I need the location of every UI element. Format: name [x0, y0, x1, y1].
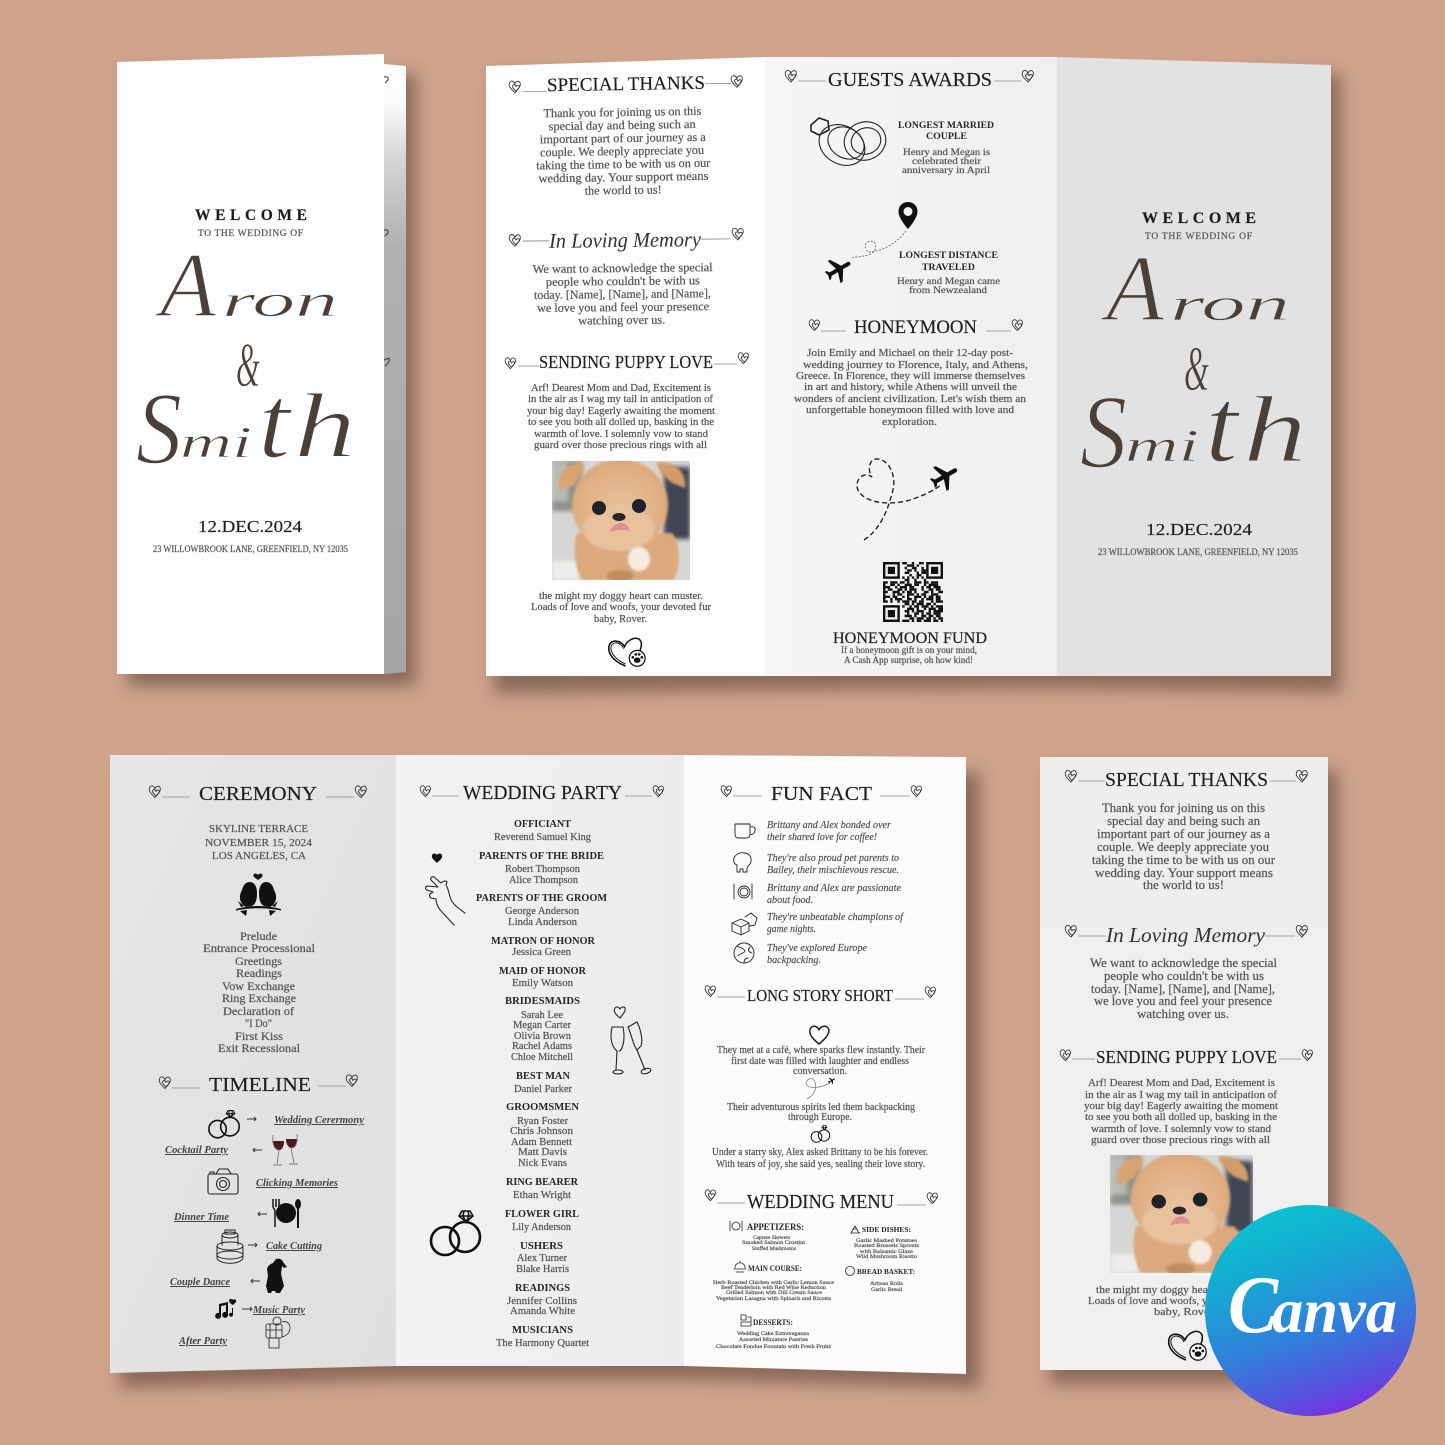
back cover: 12.DEC.2024 — [1146, 520, 1253, 539]
text: thanks message: the world to us! — [585, 182, 662, 198]
text: memory message — [1090, 956, 1278, 1021]
text: story part one — [717, 1045, 926, 1077]
menu: bread basket: Garlic Bread — [871, 1287, 902, 1293]
script names: S — [136, 372, 182, 486]
text: puppy letter: your big day! Eagerly awaiting the moment — [527, 406, 715, 417]
icon: music notes — [215, 1299, 236, 1319]
text: puppy letter: in the air as I wag my tail in anticipation of — [528, 394, 714, 405]
text: puppy letter — [1084, 1077, 1278, 1146]
text: puppy letter: Arf! Dearest Mom and Dad, Excitement is — [531, 383, 711, 394]
text: longest married couple: celebrated their — [912, 156, 982, 167]
text: story part one: conversation. — [793, 1066, 847, 1077]
back cover: mi — [1125, 421, 1199, 471]
panel group: tri-fold inside top — [486, 57, 1341, 694]
list: wedding party names: BRIDESMAIDS — [505, 996, 580, 1007]
text: honeymoon description: unforgettable honeymoon filled with love and — [806, 404, 1015, 416]
list: wedding party names: Megan Carter — [513, 1020, 571, 1031]
back cover: ron — [1170, 279, 1290, 331]
timeline labels: Cake Cutting — [266, 1241, 322, 1252]
icon: dancing couple — [266, 1259, 287, 1293]
back cover — [1080, 210, 1307, 558]
timeline labels: Music Party — [252, 1305, 306, 1316]
heading: in loving memory — [1065, 923, 1307, 947]
text: ceremony venue — [205, 823, 313, 862]
text: memory message: people who couldn't be with us — [1104, 969, 1264, 983]
menu: side dishes — [854, 1225, 919, 1260]
timeline labels — [165, 1115, 365, 1347]
list: wedding party names: Amanda White — [510, 1306, 575, 1317]
icon: after party — [266, 1317, 290, 1348]
menu: side dishes: Wild Mushroom Risotto — [856, 1254, 917, 1260]
list: wedding party names: Alex Turner — [517, 1253, 567, 1264]
text: fun facts: game nights. — [767, 924, 816, 935]
text: puppy sign-off: the might my doggy heart can muster. — [1096, 1284, 1270, 1296]
list: wedding party names: Sarah Lee — [521, 1010, 563, 1021]
text: thanks message: taking the time to be with us on our — [1092, 853, 1276, 867]
list: wedding party names: Chris Johnson — [510, 1126, 574, 1137]
text: thanks message: taking the time to be with us on our — [536, 156, 710, 172]
heading: wedding menu — [705, 1190, 938, 1213]
heading: wedding party: WEDDING PARTY — [463, 783, 622, 804]
icon: wine glasses — [273, 1134, 298, 1165]
list: wedding party names: Jennifer Collins — [507, 1296, 577, 1307]
heading: honeymoon — [809, 317, 1023, 338]
icon: heart flight path — [857, 458, 964, 540]
text: puppy letter: warmth of love. I solemnly vow to stand — [534, 429, 709, 440]
text: longest married couple: COUPLE — [926, 131, 967, 142]
heading: honeymoon fund: HONEYMOON FUND — [833, 630, 987, 647]
text: ceremony venue: NOVEMBER 15, 2024 — [205, 837, 313, 849]
script names: & — [236, 332, 260, 400]
list: wedding party names: Ryan Foster — [517, 1116, 569, 1127]
text: fund rhyme — [841, 645, 977, 665]
menu: desserts: Wedding Cake Extravaganza — [737, 1331, 810, 1337]
text: fun facts: Bailey, their mischievous rescue. — [767, 865, 899, 876]
text: fund rhyme: If a honeymoon gift is on your mind, — [841, 645, 977, 655]
text: honeymoon description: Greece. In Florence, they will immerse themselves — [796, 370, 1025, 382]
text: longest distance traveled: TRAVELED — [922, 262, 975, 273]
text: memory message: We want to acknowledge the special — [533, 260, 713, 276]
text: fun facts: their shared love for coffee! — [767, 832, 877, 843]
text: honeymoon description: wonders of ancient civilization. Let's wish them an — [794, 393, 1027, 405]
back cover: t — [1205, 367, 1241, 484]
menu: desserts — [716, 1318, 831, 1350]
list: wedding party names: Alice Thompson — [509, 875, 579, 886]
address: 23 WILLOWBROOK LANE, GREENFIELD, NY 12035 — [153, 545, 348, 555]
icon: cake — [217, 1230, 243, 1263]
menu: bread basket — [857, 1267, 915, 1293]
menu: appetizers: Smoked Salmon Crostini — [742, 1240, 806, 1246]
back cover: & — [1184, 334, 1209, 404]
list: wedding party names: Matt Davis — [518, 1147, 567, 1158]
text: memory message: today. [Name], [Name], and [Name], — [1091, 982, 1275, 996]
menu: appetizers — [742, 1222, 806, 1252]
text: honeymoon description: exploration. — [882, 416, 937, 428]
back cover: S — [1080, 373, 1127, 490]
heading: welcome: WELCOME — [195, 207, 307, 224]
text: story part two: through Europe. — [788, 1112, 852, 1123]
text: longest married couple: Henry and Megan is — [903, 147, 990, 158]
icon: heart with paw — [609, 638, 645, 666]
back cover: 23 WILLOWBROOK LANE, GREENFIELD, NY 12035 — [1098, 548, 1298, 558]
icon: dinner plate — [273, 1199, 301, 1228]
heading: in loving memory — [509, 227, 744, 253]
script names: A — [154, 234, 217, 336]
text: ceremony venue: SKYLINE TERRACE — [209, 823, 308, 835]
text: puppy sign-off: Loads of love and woofs, your devoted fur — [531, 602, 711, 613]
text: memory message — [533, 260, 714, 328]
timeline labels: Wedding Cerermony — [274, 1115, 365, 1126]
list: wedding party names: USHERS — [520, 1241, 563, 1252]
text: puppy letter — [527, 383, 715, 451]
text: memory message: we love you and feel your presence — [537, 299, 709, 315]
icon: heart with paw — [1169, 1331, 1206, 1360]
text: memory message: watching over us. — [1137, 1007, 1229, 1021]
heading: honeymoon: HONEYMOON — [854, 317, 977, 338]
menu: main course: MAIN COURSE: — [748, 1264, 802, 1273]
list: wedding party names: MATRON OF HONOR — [491, 936, 595, 947]
list: wedding party names: OFFICIANT — [514, 819, 571, 830]
panel: single back page — [1040, 757, 1338, 1384]
photo: puppy — [552, 459, 690, 582]
text: puppy sign-off: baby, Rover. — [594, 614, 647, 625]
list: wedding party names: Linda Anderson — [508, 917, 578, 928]
list: wedding party names: FLOWER GIRL — [505, 1209, 579, 1220]
text: order of service: Entrance Processional — [203, 943, 315, 955]
back cover: A — [1100, 237, 1165, 341]
text: longest married couple — [898, 120, 994, 176]
text: longest married couple: anniversary in April — [902, 165, 990, 176]
text: order of service: First Kiss — [235, 1031, 284, 1043]
timeline labels: Cocktail Party — [165, 1145, 229, 1156]
date: 12.DEC.2024 — [198, 517, 303, 536]
heading: ceremony — [149, 783, 366, 805]
list: wedding party names: GROOMSMEN — [506, 1102, 579, 1113]
timeline labels: Dinner Time — [173, 1212, 230, 1223]
list: wedding party names: Robert Thompson — [505, 864, 581, 875]
list: wedding party names — [476, 819, 607, 1349]
text: longest distance traveled: from Newzealand — [909, 285, 987, 296]
icons: fun fact list — [732, 824, 757, 963]
heading: guests awards — [785, 69, 1033, 91]
text: order of service: Vow Exchange — [222, 981, 295, 993]
text: longest distance traveled: Henry and Megan came — [897, 276, 1001, 287]
icon: small rings — [811, 1126, 830, 1142]
icon: love birds — [236, 874, 281, 916]
menu icons — [730, 1221, 860, 1326]
text: puppy letter: Arf! Dearest Mom and Dad, Excitement is — [1088, 1077, 1275, 1089]
text: memory message: We want to acknowledge the special — [1090, 956, 1278, 970]
heading: sending puppy love: SENDING PUPPY LOVE — [539, 352, 713, 372]
script names — [136, 234, 356, 486]
text: honeymoon description: Join Emily and Michael on their 12-day post- — [807, 347, 1013, 359]
menu: desserts: DESSERTS: — [753, 1318, 793, 1327]
subheading: TO THE WEDDING OF — [198, 229, 303, 239]
heading: sending puppy love: SENDING PUPPY LOVE — [1096, 1047, 1277, 1067]
text: fun facts: backpacking. — [767, 955, 821, 966]
back cover: h — [1243, 378, 1307, 482]
icon: heart — [810, 1026, 829, 1044]
list: wedding party names: Ethan Wright — [513, 1190, 571, 1201]
text: thanks message: special day and being such an — [1107, 814, 1261, 828]
text: order of service: "I Do" — [245, 1018, 272, 1030]
text: longest distance traveled: LONGEST DISTANCE — [899, 250, 998, 261]
text: fun facts: They've explored Europe — [767, 943, 867, 954]
heading: long story short: LONG STORY SHORT — [747, 986, 893, 1005]
menu: appetizers: Stuffed Mushrooms — [752, 1245, 796, 1252]
text: order of service: Exit Recessional — [218, 1043, 300, 1055]
text: memory message: we love you and feel your presence — [1094, 994, 1272, 1008]
list: wedding party names: BEST MAN — [516, 1071, 570, 1082]
list: wedding party names: Jessica Green — [512, 947, 572, 958]
text: order of service: Prelude — [240, 931, 277, 943]
menu: side dishes: Garlic Mashed Potatoes — [856, 1238, 917, 1244]
text: puppy letter: your big day! Eagerly awaiting the moment — [1084, 1100, 1278, 1112]
list: wedding party names: Rachel Adams — [512, 1041, 572, 1052]
script names: t — [258, 365, 292, 480]
text: fun facts: Brittany and Alex are passionate — [767, 883, 901, 894]
text: honeymoon description: wedding journey to Florence, Italy, and Athens, — [803, 359, 1028, 371]
heading: timeline: TIMELINE — [209, 1074, 311, 1096]
text: story part two: Their adventurous spirits led them backpacking — [727, 1102, 915, 1113]
text: order of service: Greetings — [235, 956, 283, 968]
text: puppy letter: guard over those precious rings with all — [1091, 1134, 1270, 1146]
script names: ron — [222, 275, 338, 326]
list: wedding party names: Emily Watson — [512, 978, 574, 989]
text: honeymoon description: in art and history, while Athens will unveil the — [804, 381, 1017, 393]
text: thanks message: special day and being such an — [549, 117, 696, 133]
text: puppy letter: to see you both all dolled up, basking in the — [528, 417, 714, 428]
heading: ceremony: CEREMONY — [199, 783, 317, 805]
text: thanks message — [535, 104, 711, 198]
panel group: tri-fold program — [110, 755, 980, 1388]
text: fun facts: about food. — [767, 895, 813, 906]
text: memory message: watching over us. — [578, 313, 665, 327]
text: story part three — [712, 1147, 928, 1170]
text: fun facts: They're unbeatable champions of — [767, 912, 905, 923]
text: order of service — [203, 931, 315, 1055]
list: wedding party names: George Anderson — [505, 906, 580, 917]
panel: folded cover brochure — [117, 54, 416, 686]
text: thanks message: the world to us! — [1143, 878, 1224, 892]
menu: appetizers: APPETIZERS: — [747, 1222, 804, 1232]
list: wedding party names: Olivia Brown — [514, 1031, 572, 1042]
text: story part three: Under a starry sky, Alex asked Brittany to be his forever. — [712, 1147, 928, 1158]
menu: bread basket: Artisan Rolls — [870, 1281, 903, 1287]
timeline arrows — [242, 1117, 267, 1311]
script names: h — [294, 375, 356, 477]
text: thanks message: wedding day. Your support means — [538, 169, 709, 185]
menu: bread basket: BREAD BASKET: — [857, 1267, 915, 1276]
heading: timeline — [159, 1074, 357, 1096]
list: wedding party names: PARENTS OF THE BRIDE — [479, 851, 604, 862]
text: puppy sign-off: baby, Rover. — [1154, 1306, 1216, 1318]
menu: desserts: Chocolate Fondue Fountain with Fresh Fruits — [716, 1344, 831, 1350]
text: order of service: Declaration of — [223, 1006, 294, 1018]
list: wedding party names: MAID OF HONOR — [499, 966, 586, 977]
text: memory message: today. [Name], [Name], and [Name], — [534, 286, 711, 302]
text: thanks message: wedding day. Your support means — [1095, 866, 1273, 880]
text: puppy letter: warmth of love. I solemnly vow to stand — [1091, 1123, 1271, 1135]
timeline labels: Couple Dance — [170, 1277, 231, 1288]
list: wedding party names: Blake Harris — [516, 1264, 569, 1275]
text: thanks message — [1092, 801, 1276, 892]
menu: side dishes: Roasted Brussels Sprouts — [854, 1243, 919, 1249]
badge: Canva logo: anva — [1272, 1275, 1397, 1346]
heading: fun fact — [721, 783, 922, 805]
heading: in loving memory: In Loving Memory — [548, 227, 702, 253]
text: thanks message: couple. We deeply appreciate you — [540, 143, 704, 159]
icon: champagne glasses — [611, 1007, 651, 1075]
menu: main course: Beef Tenderloin with Red Wine Reduction — [721, 1284, 826, 1291]
icon: finger heart hand — [426, 854, 465, 925]
menu: main course: Vegetarian Lasagna with Spinach and Ricotta — [716, 1296, 832, 1302]
text: memory message: people who couldn't be with us — [546, 273, 700, 289]
list: wedding party names: READINGS — [515, 1283, 570, 1294]
list: wedding party names: Nick Evans — [518, 1158, 567, 1169]
heading: special thanks — [509, 72, 743, 97]
heading: guests awards: GUESTS AWARDS — [828, 69, 992, 91]
icon: sketched wedding rings — [811, 116, 891, 173]
icon: map pin and plane route — [821, 202, 918, 287]
text: puppy letter: to see you both all dolled up, basking in the — [1085, 1111, 1277, 1123]
heading: special thanks: SPECIAL THANKS — [547, 73, 705, 96]
heading: wedding party — [420, 783, 664, 804]
list: wedding party names: Reverend Samuel King — [494, 832, 592, 843]
text: puppy sign-off: Loads of love and woofs, your devoted fur — [1088, 1295, 1275, 1307]
badge: Canva logo — [1205, 1205, 1416, 1416]
text: puppy letter: guard over those precious rings with all — [534, 440, 707, 451]
icon: wedding rings — [431, 1211, 480, 1255]
text: thanks message: Thank you for joining us on this — [1102, 801, 1265, 815]
text: thanks message: Thank you for joining us on this — [543, 104, 702, 120]
back cover: TO THE WEDDING OF — [1145, 232, 1252, 242]
text: longest married couple: LONGEST MARRIED — [898, 120, 994, 131]
text: puppy letter: in the air as I wag my tail in anticipation of — [1085, 1089, 1277, 1101]
heading: long story short — [705, 986, 936, 1005]
list: wedding party names: Lily Anderson — [512, 1222, 572, 1233]
heading: in loving memory: In Loving Memory — [1105, 923, 1266, 947]
icon: rings — [209, 1110, 239, 1138]
heading: special thanks — [1065, 769, 1307, 791]
text: order of service: Readings — [236, 968, 283, 980]
icon: camera — [208, 1169, 238, 1194]
heading: special thanks: SPECIAL THANKS — [1105, 769, 1268, 791]
text: story part two — [727, 1102, 915, 1123]
text: puppy sign-off — [531, 591, 711, 625]
badge: Canva logo: C — [1228, 1259, 1279, 1350]
text: puppy sign-off — [1088, 1284, 1275, 1318]
text: fun facts: They're also proud pet parents to — [767, 853, 899, 864]
text: thanks message: important part of our journey as a — [540, 130, 707, 146]
text: thanks message: important part of our journey as a — [1097, 827, 1270, 841]
heading: wedding menu: WEDDING MENU — [747, 1191, 895, 1213]
icon: small heart flight — [806, 1076, 837, 1099]
text: ceremony venue: LOS ANGELES, CA — [212, 850, 306, 862]
menu: main course: Herb-Roasted Chicken with Garlic Lemon Sauce — [713, 1280, 835, 1286]
text: honeymoon description — [794, 347, 1028, 428]
list: wedding party names: Chloe Mitchell — [511, 1052, 573, 1063]
list: wedding party names: Daniel Parker — [514, 1084, 572, 1095]
list: wedding party names: The Harmony Quartet — [496, 1338, 589, 1349]
text: fun facts: Brittany and Alex bonded over — [767, 820, 892, 831]
text: story part three: With tears of joy, she said yes, sealing their love story. — [716, 1159, 925, 1170]
menu: side dishes: SIDE DISHES: — [862, 1225, 911, 1234]
heading: fun fact: FUN FACT — [771, 783, 872, 805]
text: longest distance traveled — [897, 250, 1001, 296]
script names: mi — [180, 418, 252, 467]
text: thanks message: couple. We deeply appreciate you — [1097, 840, 1270, 854]
photo: puppy — [1110, 1153, 1253, 1275]
list: wedding party names: MUSICIANS — [512, 1325, 573, 1336]
text: puppy sign-off: the might my doggy heart can muster. — [539, 591, 703, 602]
text: story part one: They met at a café, where sparks flew instantly. Their — [717, 1045, 926, 1056]
back cover: WELCOME — [1142, 210, 1256, 227]
menu: appetizers: Caprese Skewers — [753, 1235, 790, 1241]
text: fund rhyme: A Cash App surprise, oh how kind! — [844, 655, 973, 665]
text: fun facts — [767, 820, 905, 966]
text: order of service: Ring Exchange — [222, 993, 296, 1005]
menu: side dishes: with Balsamic Glaze — [860, 1249, 914, 1255]
menu: main course — [713, 1264, 835, 1302]
menu: desserts: Assorted Miniature Pastries — [739, 1337, 808, 1343]
list: wedding party names: PARENTS OF THE GROOM — [476, 893, 607, 904]
list: wedding party names: Adam Bennett — [511, 1137, 572, 1148]
list: wedding party names: RING BEARER — [506, 1177, 578, 1188]
timeline labels: After Party — [178, 1336, 228, 1347]
text: story part one: first date was filled with laughter and endless — [731, 1056, 909, 1067]
timeline labels: Clicking Memories — [256, 1178, 338, 1189]
qr code — [883, 562, 943, 622]
inner page bleed marks — [384, 77, 389, 366]
menu: main course: Grilled Salmon with Dill Cream Sauce — [726, 1290, 823, 1296]
